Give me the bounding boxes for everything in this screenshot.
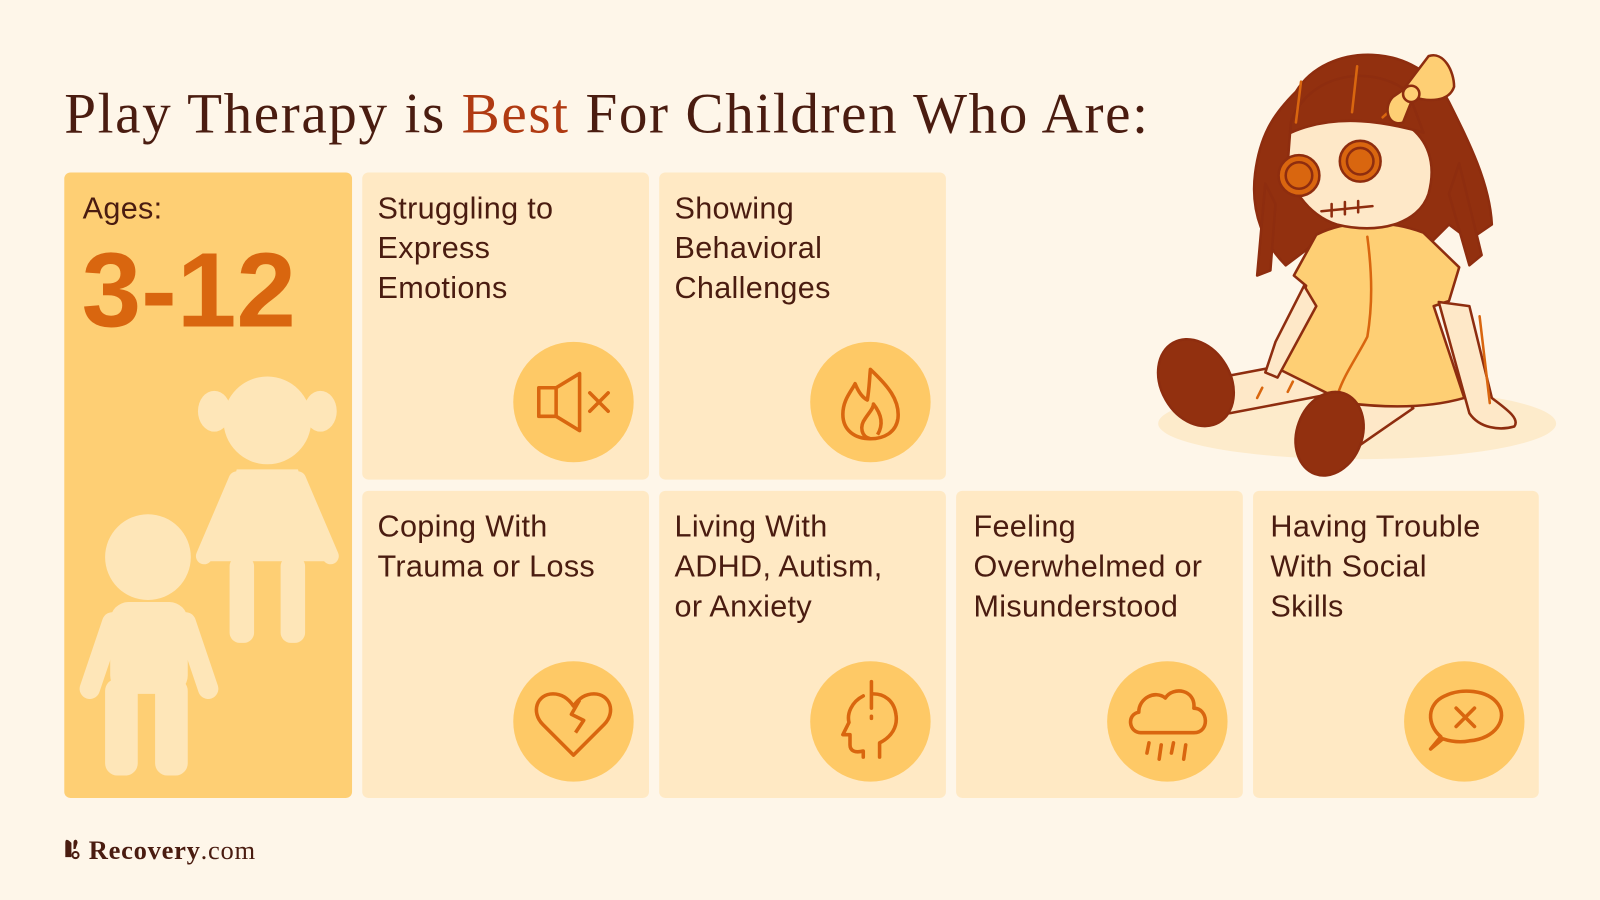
- logo: Recovery.com: [89, 835, 255, 865]
- illustration: rag doll: [1143, 55, 1556, 485]
- panel: ages: [64, 172, 352, 798]
- panel: social skills: Skills: [1270, 589, 1344, 623]
- icon: speech bubble x: [1431, 691, 1502, 749]
- icon: head exclamation: [843, 682, 896, 757]
- panel: ADHD autism anxiety: Living With: [674, 510, 828, 544]
- icon: broken heart: [536, 694, 611, 755]
- panel: ADHD autism anxiety: [659, 491, 946, 798]
- panel: social skills: [1253, 491, 1539, 798]
- panel: behavioral challenges: Showing: [674, 191, 794, 225]
- icon: girl silhouette: [198, 377, 337, 643]
- icon: muted speaker: [539, 373, 608, 431]
- title: Play Therapy is Best For Children Who Are:: [64, 83, 1148, 146]
- panel: social skills: With Social: [1270, 550, 1427, 584]
- panel: overwhelmed or misunderstood: Feeling: [973, 510, 1076, 544]
- panel: behavioral challenges: [659, 172, 946, 480]
- panel: ADHD autism anxiety: ADHD, Autism,: [674, 550, 883, 584]
- panel: struggling to express emotions: Struggling to: [378, 191, 553, 225]
- panel: struggling to express emotions: [362, 172, 649, 480]
- icon: flame: [843, 369, 898, 439]
- panel: ages: Ages:: [83, 191, 162, 225]
- panel: overwhelmed or misunderstood: [956, 491, 1243, 798]
- panel: trauma or loss: Trauma or Loss: [378, 550, 595, 584]
- panel: struggling to express emotions: Emotions: [378, 271, 508, 305]
- panel: trauma or loss: [362, 491, 649, 798]
- panel: ages: 3-12: [82, 232, 296, 350]
- panel: trauma or loss: Coping With: [378, 510, 548, 544]
- icon: boy silhouette: [90, 514, 208, 776]
- panel: social skills: Having Trouble: [1270, 510, 1481, 544]
- panel: struggling to express emotions: Express: [378, 231, 490, 265]
- icon: rain cloud: [1131, 691, 1205, 759]
- panel: overwhelmed or misunderstood: Misunderstood: [973, 589, 1178, 623]
- panel: overwhelmed or misunderstood: Overwhelmed or: [973, 550, 1202, 584]
- panel: behavioral challenges: Challenges: [674, 271, 831, 305]
- panel: behavioral challenges: Behavioral: [674, 231, 822, 265]
- panel: ADHD autism anxiety: or Anxiety: [674, 589, 812, 623]
